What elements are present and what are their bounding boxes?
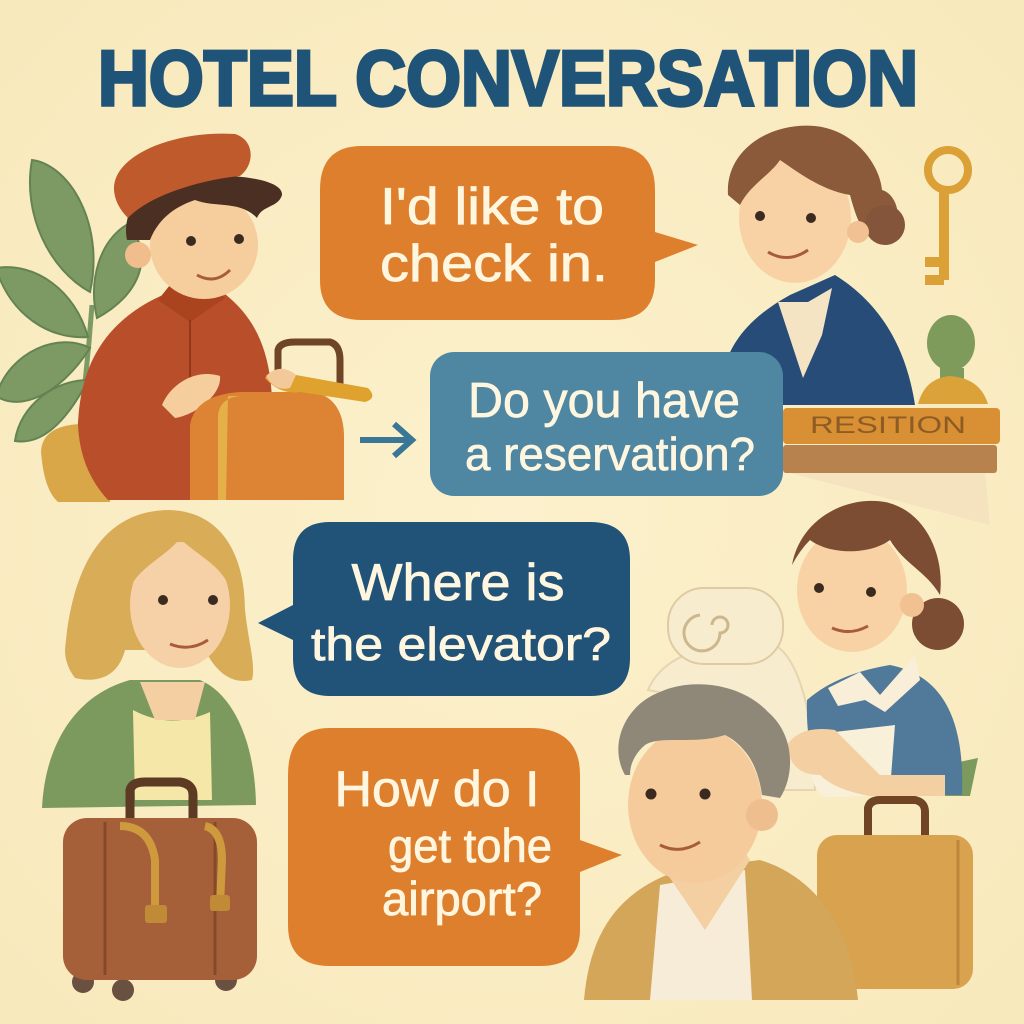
receptionist jacket xyxy=(718,275,915,405)
housekeeper towel and hand xyxy=(808,725,895,797)
housekeeper green accent xyxy=(945,758,978,796)
arrow xyxy=(360,424,412,456)
suitcase: tan xyxy=(817,800,973,989)
speech bubble: airport xyxy=(288,728,622,966)
speech bubble: airport: get tohe xyxy=(388,819,552,872)
reservation bell stamp xyxy=(918,315,988,404)
housekeeper head xyxy=(797,528,907,652)
bellhop hand xyxy=(162,374,220,418)
reception desk xyxy=(783,408,1000,525)
housekeeper uniform xyxy=(807,665,962,795)
man jacket xyxy=(584,860,858,1000)
woman cardigan xyxy=(42,680,256,808)
speech bubble: reservation: a reservation? xyxy=(465,428,755,480)
speech bubble: reservation xyxy=(430,352,783,496)
speech bubble: airport: airport? xyxy=(382,872,542,925)
speech bubble: check in xyxy=(320,146,698,320)
bellhop cap xyxy=(114,134,251,218)
title: HOTEL CONVERSATION xyxy=(98,36,918,122)
speech bubble: elevator xyxy=(258,522,630,696)
man head xyxy=(628,727,762,883)
icon: key xyxy=(925,150,968,280)
towel stack xyxy=(648,588,815,790)
desk sign text: RESITION xyxy=(810,412,966,439)
bellhop body xyxy=(78,294,272,500)
plant xyxy=(0,160,142,502)
speech bubble: check in: I'd like to xyxy=(380,178,604,236)
suitcase: brown xyxy=(63,782,257,1001)
speech bubble: elevator: Where is xyxy=(352,554,564,612)
man hair xyxy=(618,684,790,798)
woman with blonde hair xyxy=(42,510,256,808)
bellhop xyxy=(78,134,282,500)
speech bubble: check in: check in. xyxy=(380,235,608,293)
receptionist xyxy=(718,126,915,405)
speech bubble: reservation: Do you have xyxy=(468,374,740,428)
speech bubble: airport: How do I xyxy=(334,761,540,817)
older man xyxy=(584,684,858,1000)
housekeeper xyxy=(787,501,978,797)
bellhop head xyxy=(150,191,258,299)
receptionist head xyxy=(739,153,851,283)
suitcase: orange xyxy=(190,342,372,500)
woman head and hair xyxy=(65,510,253,681)
speech bubble: elevator: the elevator? xyxy=(311,618,611,670)
